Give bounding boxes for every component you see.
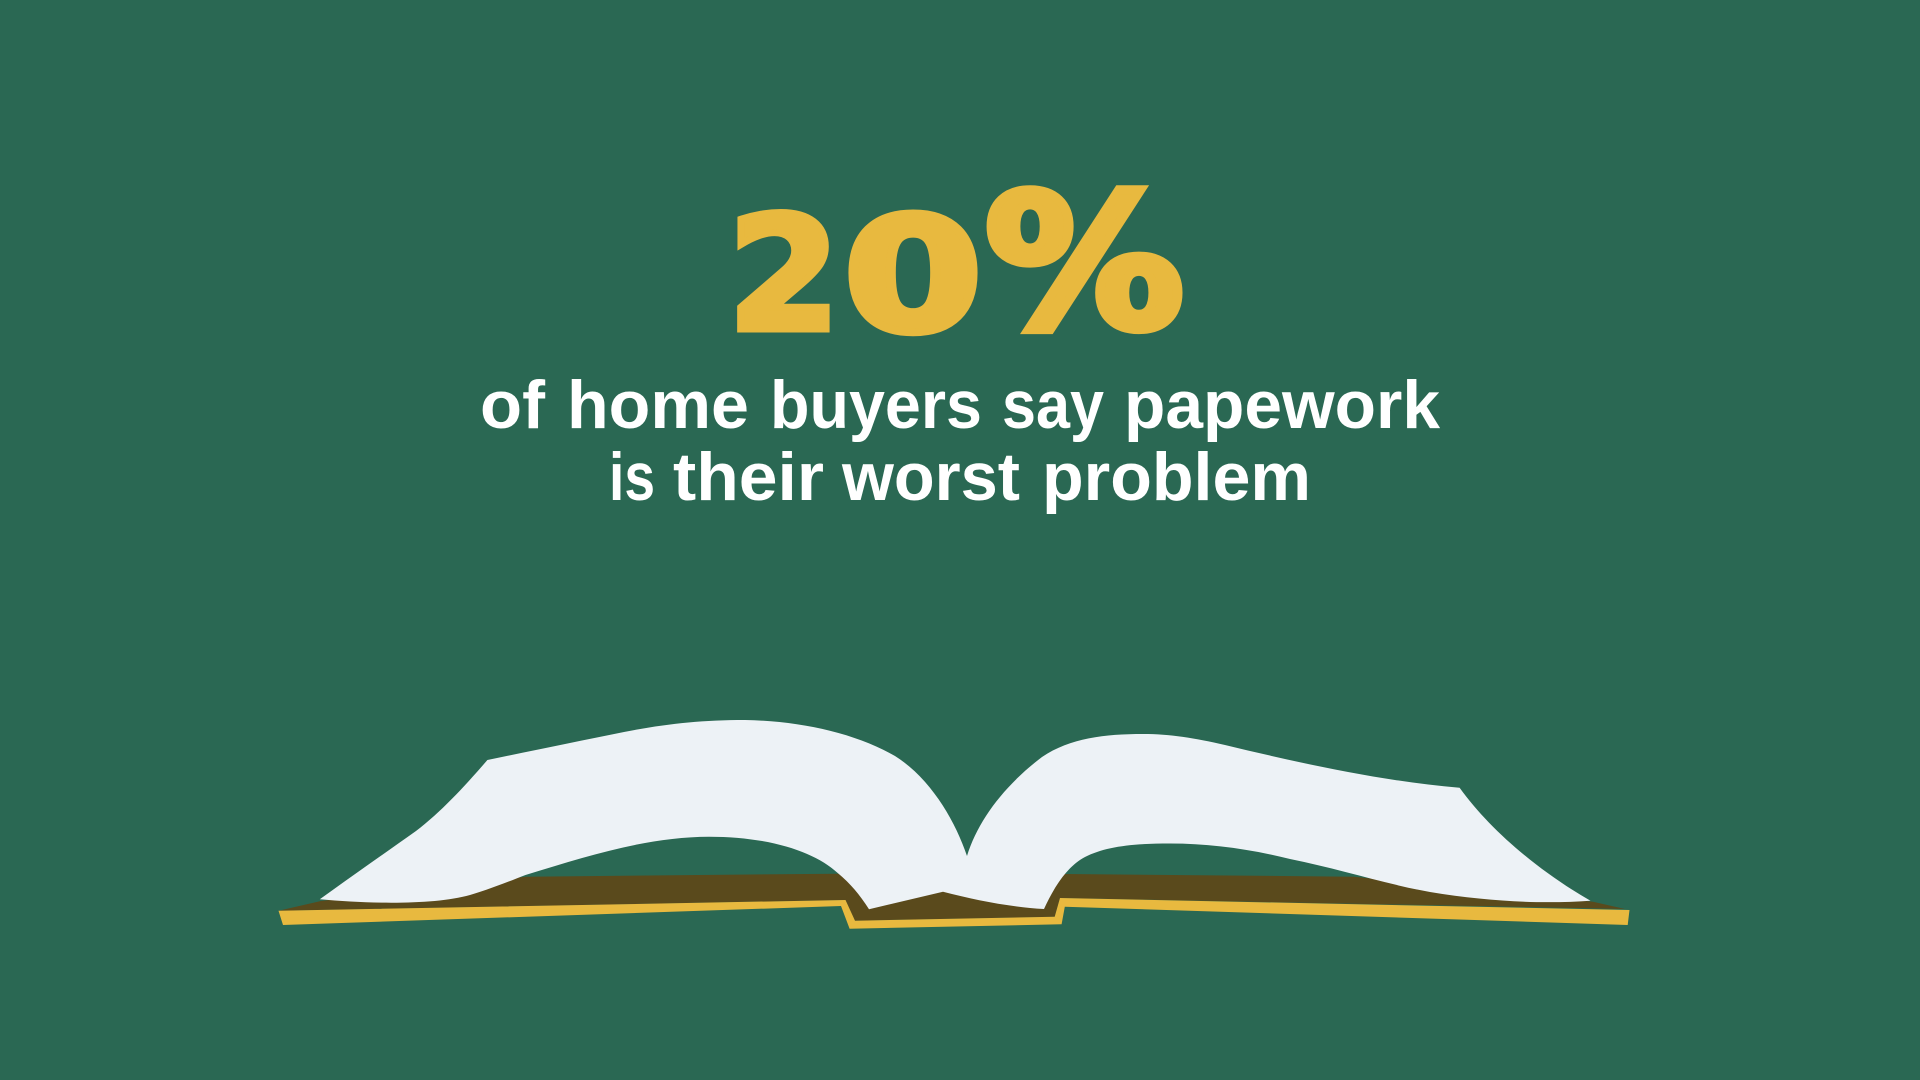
subtitle text: worst [841, 439, 1020, 515]
big statistic: 20%: 0 [844, 185, 982, 368]
big statistic: 20%: 2 [728, 184, 840, 367]
subtitle text: problem [1042, 439, 1311, 515]
open book illustration [278, 720, 1630, 929]
subtitle text: say [1002, 367, 1104, 443]
big statistic: 20%: % [985, 155, 1184, 371]
subtitle text: of [480, 367, 545, 443]
book cover, gold edge [278, 898, 1630, 929]
subtitle text: home [567, 367, 749, 443]
subtitle text: papework [1124, 367, 1440, 443]
subtitle text [480, 367, 1440, 515]
book pages [320, 720, 1590, 909]
big statistic: 20% [728, 155, 1184, 371]
subtitle text: their [673, 439, 824, 515]
subtitle text: buyers [770, 367, 982, 443]
subtitle text: is [609, 439, 655, 515]
book cover, brown inside [278, 874, 1625, 921]
